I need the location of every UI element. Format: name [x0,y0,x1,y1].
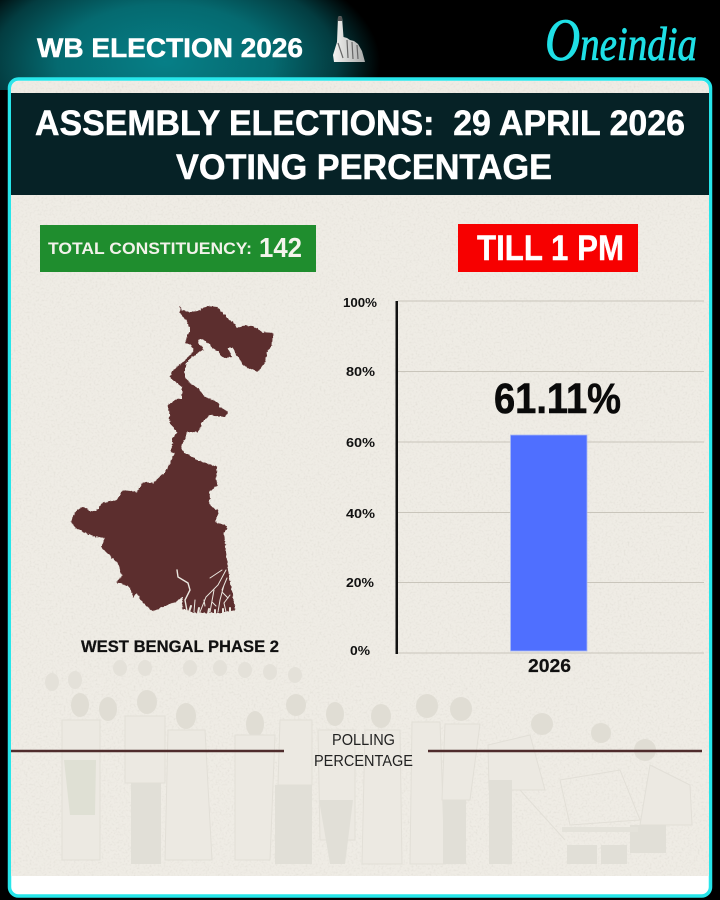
polling percentage divider: POLLING [332,732,395,749]
map: West Bengal [71,305,273,614]
y-axis labels [343,295,377,658]
heading line 2: VOTING PERCENTAGE [176,148,552,187]
y-axis labels: 20% [346,575,374,590]
illustration: queue of voters [45,660,692,864]
badge: total constituency: TOTAL CONSTITUENCY: [48,239,252,258]
map caption: WEST BENGAL PHASE 2 [81,638,279,656]
bar value: 61.11% [494,375,621,423]
bar chart [343,295,704,676]
bar: 2026 [510,435,587,651]
badge: total constituency: 142 [259,232,302,263]
heading line 1: ASSEMBLY ELECTIONS: 29 APRIL 2026 [35,104,685,143]
heading band [11,93,709,195]
y-axis labels: 40% [346,506,375,521]
bar label: 2026 [528,656,571,676]
y-axis labels: 100% [343,295,377,310]
logo: Oneindia: Oneindia [545,7,697,73]
y-axis labels: 60% [346,435,375,450]
y-axis labels: 0% [350,643,370,658]
chart axis [396,301,398,654]
y-axis labels: 80% [346,364,375,379]
header title: WB ELECTION 2026 [37,33,303,63]
icon: voting finger [333,16,365,62]
badge: till 1 pm: TILL 1 PM [477,229,624,268]
polling percentage divider: PERCENTAGE [314,753,413,770]
badge: total constituency [40,225,316,272]
polling percentage divider [11,732,702,770]
